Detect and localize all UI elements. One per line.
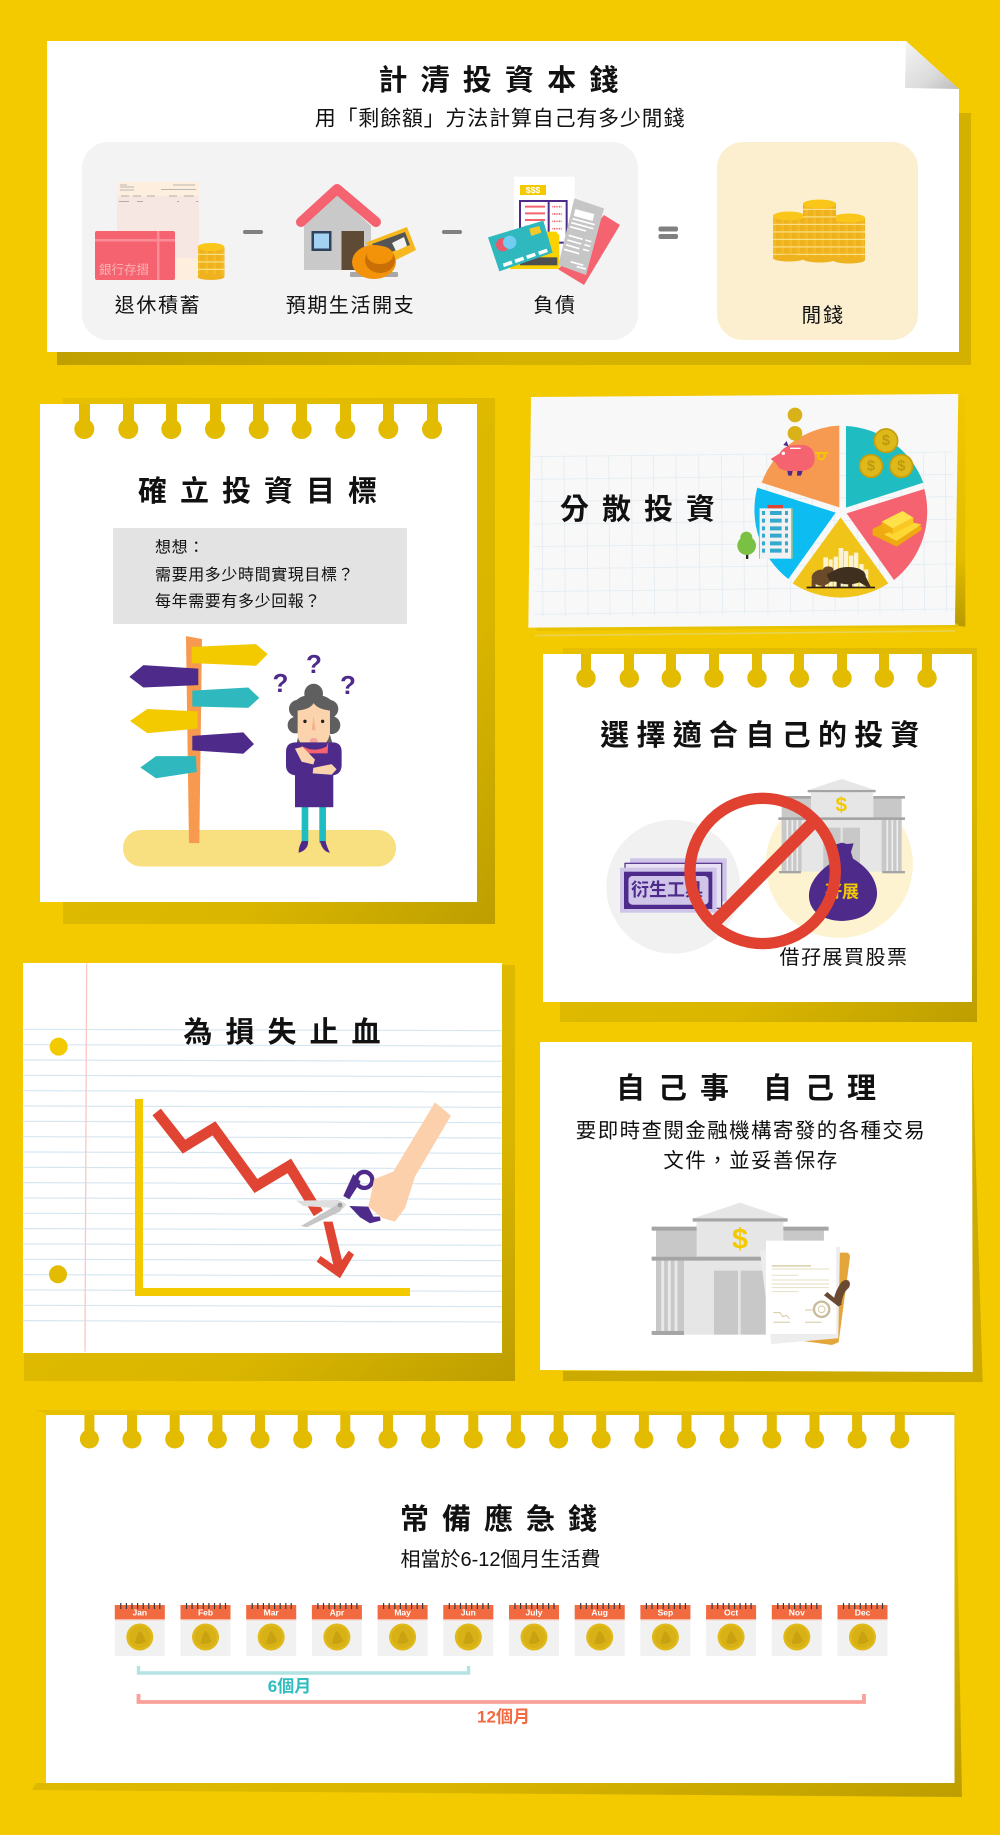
icon: bank and margin bag on cream circle <box>766 779 913 938</box>
label: liabilities: 負債 <box>533 294 577 317</box>
icon: question marks: ? <box>273 668 288 698</box>
calendar row: twelve months: July <box>525 1608 543 1618</box>
label: expected living expenses: 預期生活開支 <box>286 294 415 317</box>
calendar row: twelve months: Nov <box>789 1608 805 1618</box>
icon: stacks of gold coins <box>773 200 865 264</box>
label: borrow on margin to buy stocks: 借孖展買股票 <box>780 946 908 969</box>
slice: coins: $ <box>882 433 890 449</box>
binding rings <box>74 404 442 439</box>
calendar row: twelve months: Jan <box>132 1608 147 1618</box>
calendar row: twelve months: Aug <box>591 1608 608 1618</box>
icon: bank building with signed documents <box>652 1203 850 1345</box>
binding rings <box>576 654 937 688</box>
subtitle: 相當於6-12個月生活費 <box>400 1548 601 1571</box>
label: six months: 6個月 <box>268 1677 311 1696</box>
label: spare money: 閒錢 <box>801 304 845 327</box>
title: 自己事 自己理 <box>616 1072 889 1105</box>
bracket: twelve months <box>138 1694 864 1702</box>
icon: question marks <box>273 649 356 700</box>
title: 常備應急錢 <box>400 1502 610 1536</box>
title: 選擇適合自己的投資 <box>600 718 927 752</box>
pie chart of asset classes <box>737 408 927 598</box>
panel: diversify investment <box>528 394 965 636</box>
calendar row: twelve months: Mar <box>264 1608 279 1618</box>
title: 確立投資目標 <box>138 475 390 508</box>
result panel <box>717 142 918 340</box>
panel: manage your own affairs <box>540 1042 983 1382</box>
calendar row: twelve months: Oct <box>724 1608 738 1618</box>
icon: question marks: ? <box>340 670 356 700</box>
question box: 每年需要有多少回報？ <box>155 592 321 610</box>
calendar row: twelve months <box>115 1603 888 1656</box>
title: 分散投資 <box>560 493 728 526</box>
title: 為損失止血 <box>183 1016 394 1049</box>
chart: falling line being cut <box>135 1099 451 1296</box>
binding rings <box>80 1415 909 1448</box>
calendar row: twelve months: Sep <box>658 1608 673 1618</box>
label: margin on bag: 孖展 <box>825 882 859 902</box>
icon: bank building with signed documents: $ <box>732 1223 748 1255</box>
slice: coins <box>846 426 923 508</box>
question box: 需要用多少時間實現目標？ <box>155 565 354 584</box>
minus sign <box>243 230 263 234</box>
lined paper and holes <box>23 963 502 1352</box>
body text: 文件，並妥善保存 <box>663 1150 839 1172</box>
icon: bills, credit card and receipt <box>488 177 620 285</box>
icon: house with turkey and card <box>301 189 416 279</box>
body text: 要即時查閱金融機構寄發的各種交易 <box>576 1120 926 1142</box>
calendar row: twelve months: Dec <box>855 1608 871 1618</box>
icon: derivatives note on grey circle <box>606 820 740 954</box>
icon: question marks: ? <box>306 649 322 679</box>
icon: bank passbook with coins: 銀行存摺 <box>99 262 149 277</box>
body text <box>576 1120 926 1172</box>
slice: stock market <box>793 517 888 598</box>
icon: thinking woman <box>286 684 342 853</box>
calendar row: twelve months: Apr <box>330 1608 345 1618</box>
ground <box>123 830 396 866</box>
slice: coins: $ <box>867 458 875 474</box>
calendar row: twelve months: Feb <box>198 1608 213 1618</box>
slice: real estate <box>754 488 836 579</box>
icon: derivatives note on grey circle: 衍生工具 <box>631 880 703 900</box>
panel: emergency fund <box>32 1410 962 1797</box>
calendar row: twelve months: May <box>394 1608 411 1618</box>
panel: stop loss <box>23 963 515 1381</box>
bracket: six months <box>138 1666 468 1673</box>
icon: prohibition sign <box>690 798 835 944</box>
icon: bills, credit card and receipt: $$$ <box>526 185 540 195</box>
label: twelve months: 12個月 <box>477 1708 530 1726</box>
panel: set investment goals <box>40 398 495 924</box>
icon: bank and margin bag on cream circle: $ <box>836 793 848 816</box>
slice: coins: $ <box>897 458 905 474</box>
tree <box>737 532 756 559</box>
minus sign <box>442 230 462 234</box>
question box: 想想： <box>155 538 205 556</box>
panel: calculate investment capital <box>47 41 971 365</box>
icon: bank passbook with coins <box>95 182 224 280</box>
icon: signpost <box>129 636 268 843</box>
folded page corner <box>905 41 959 89</box>
question box <box>113 528 407 624</box>
panel: choose suitable investment <box>543 648 977 1022</box>
equals sign <box>658 226 678 239</box>
equation panel <box>82 142 638 340</box>
title: 計清投資本錢 <box>378 64 632 97</box>
label: retirement savings: 退休積蓄 <box>115 294 201 317</box>
subtitle: 用「剩餘額」方法計算自己有多少閒錢 <box>315 108 685 130</box>
slice: piggy bank <box>762 408 839 507</box>
grid paper lines <box>533 452 955 616</box>
calendar row: twelve months: Jun <box>461 1608 476 1618</box>
slice: gold bars <box>847 489 927 580</box>
